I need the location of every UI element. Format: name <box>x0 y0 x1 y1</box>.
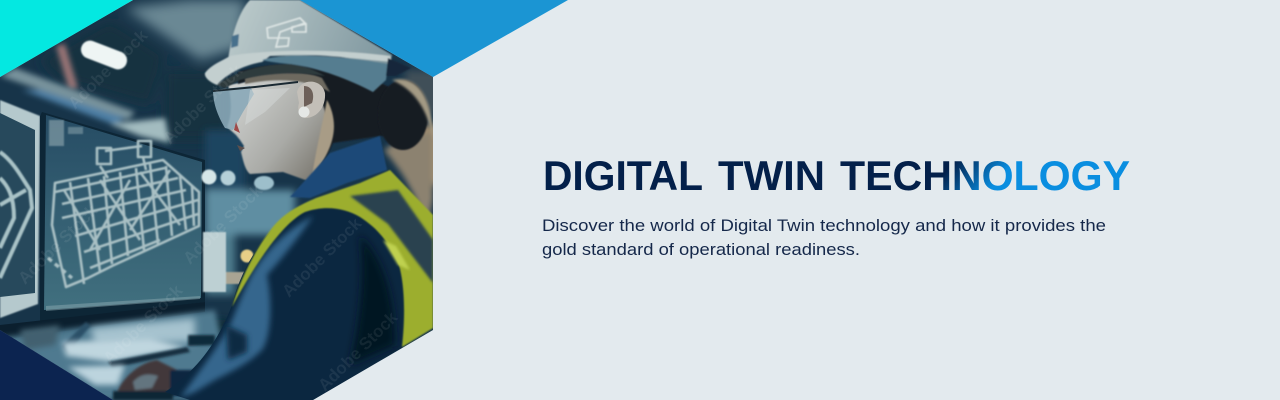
woman <box>165 0 433 400</box>
image watermark: Adobe Stock <box>278 214 366 301</box>
overhead light <box>80 40 128 70</box>
image watermark: Adobe Stock <box>14 201 102 288</box>
sleeve shadow notch <box>226 325 247 360</box>
title: DIGITAL <box>543 152 703 199</box>
vest <box>232 170 433 347</box>
mouth and nose shade <box>237 145 245 151</box>
ear <box>297 82 325 118</box>
jacket <box>165 208 404 400</box>
description: Discover the world of Digital Twin technology and how it provides the <box>542 216 1106 235</box>
hair wisps over warm background <box>383 131 433 215</box>
description <box>542 216 1106 259</box>
back wall bokeh <box>205 70 440 350</box>
left monitor <box>0 100 40 318</box>
neck and face <box>227 79 326 180</box>
image watermark: Adobe Stock <box>314 308 402 395</box>
description: gold standard of operational readiness. <box>542 240 860 259</box>
vest reflective strip <box>350 190 433 283</box>
image watermark: Adobe Stock <box>99 281 187 368</box>
photo: engineer at monitors <box>0 0 440 400</box>
image watermark <box>14 26 402 395</box>
photo background <box>0 0 433 400</box>
main monitor <box>40 112 205 322</box>
wireframe model <box>48 141 199 287</box>
ceiling <box>40 0 245 140</box>
hard hat <box>205 0 411 92</box>
title: TECHNOLOGY <box>840 152 1130 199</box>
blue corner shape <box>300 0 568 77</box>
safety glasses <box>213 81 298 130</box>
hand on keyboard <box>113 360 197 400</box>
hair <box>237 66 388 158</box>
title: TWIN <box>718 152 825 199</box>
image watermark: Adobe Stock <box>159 61 247 148</box>
jacket shoulder highlight <box>180 216 313 398</box>
jacket shadow <box>350 235 395 365</box>
image watermark: Adobe Stock <box>179 181 267 268</box>
beam <box>0 68 170 143</box>
monitor stand and desk <box>0 302 235 400</box>
right side lights <box>202 170 274 292</box>
teal corner triangle <box>0 0 133 77</box>
image watermark: Adobe Stock <box>64 26 152 113</box>
pink streak <box>56 44 78 90</box>
collar <box>290 136 387 198</box>
title <box>543 152 1130 199</box>
hair bun <box>378 80 428 150</box>
navy corner triangle <box>0 330 113 400</box>
